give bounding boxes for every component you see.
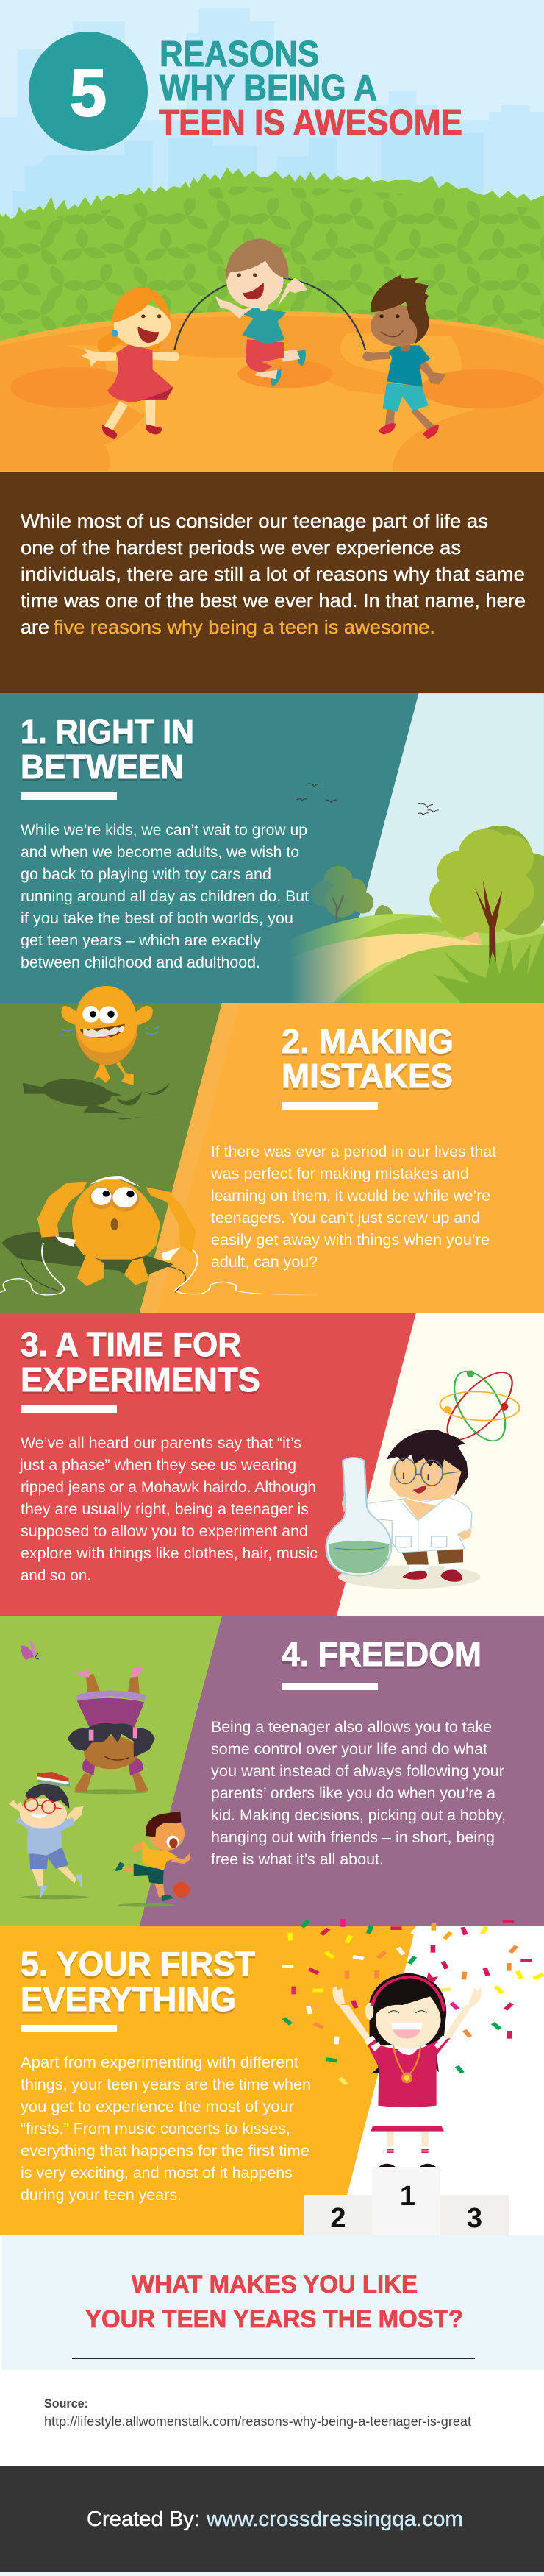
confetti [282,1919,544,2085]
body text: some control over your life and do what [211,1741,487,1758]
logo circle with number 5 [29,32,148,151]
body text: supposed to allow you to experiment and [21,1523,308,1540]
white plug cords [0,1243,64,1295]
created by credit: www.crossdressingqa.com [206,2508,463,2531]
intro panel [0,471,544,693]
body text [21,2054,311,2204]
intro text [21,510,526,638]
heading: MISTAKES [282,1057,453,1095]
intro text: are [21,616,49,638]
big tree [429,826,544,971]
boy jumping in the middle [215,239,307,386]
body text: If there was ever a period in our lives that [211,1143,496,1160]
created by credit [87,2508,463,2531]
body text: is very exciting, and most of it happens [21,2165,293,2182]
body text [19,1435,318,1584]
closing question: WHAT MAKES YOU LIKE [132,2271,418,2299]
butterfly [21,1639,39,1660]
podium [304,2167,509,2235]
source: Source: [44,2396,88,2410]
body text: learning on them, it would be while we’re [211,1188,490,1204]
heading: EVERYTHING [21,1980,236,2018]
handstand girl [68,1667,155,1794]
heading: 5. YOUR FIRST [21,1945,255,1983]
closing question panel [1,2235,544,2370]
logo circle with number 5: 5 [70,57,107,130]
podium: 1 [400,2181,415,2212]
hero panel [0,0,544,472]
title: WHY BEING A [160,68,377,108]
body text: during your teen years. [21,2187,182,2204]
body text: “firsts.” From music concerts to kisses, [21,2121,290,2137]
body text: things, your teen years are the time when [21,2076,311,2093]
kids illustration [9,1639,191,1907]
body text: you get to experience the most of your [21,2098,294,2115]
created by credit: Created By: [87,2508,200,2531]
grass [434,934,544,1003]
body text: go back to playing with toy cars and [21,866,271,883]
intro text: five reasons why being a teen is awesome. [54,616,435,638]
grounded monster shadow [1,1232,173,1279]
body text [21,822,309,971]
intro text: time was one of the best we ever had. In that name, here [21,589,526,611]
section 1: right in between [0,693,544,1003]
winner girl [333,1972,482,2167]
heading: 1. RIGHT IN [21,712,194,751]
footer [0,2466,544,2576]
glasses kid with books [9,1772,89,1899]
body text: While we’re kids, we can’t wait to grow up [21,822,307,839]
heading [21,1945,255,2018]
body text [210,1143,496,1271]
boy on the right with rope [362,275,445,439]
heading: 4. FREEDOM [282,1635,482,1673]
body text: ripped jeans or a Mohawk hairdo. Although [21,1479,316,1496]
intro text: one of the hardest periods we ever experience as [21,536,461,558]
body text: parents’ orders like you do when you’re a [211,1785,495,1802]
small tree [311,866,394,926]
body text: and when we become adults, we wish to [21,844,299,861]
section 4: freedom [0,1616,544,1926]
body text: We’ve all heard our parents say that “it’s [21,1435,301,1452]
body text: explore with things like clothes, hair, music [21,1545,318,1562]
source [44,2396,471,2429]
body text: you want instead of always following your [211,1763,504,1780]
body text: easily get away with things when you’re [211,1232,490,1249]
grounded furry monster [37,1176,196,1286]
body text: just a phase” when they see us wearing [19,1457,296,1474]
podium: 3 [467,2203,482,2234]
body text: adult, can you? [211,1254,318,1271]
birds [296,784,439,815]
body text: hanging out with friends – in short, being [211,1829,495,1846]
atom symbol [435,1366,525,1447]
podium: 2 [330,2203,346,2234]
body text [211,1719,506,1868]
body text: get teen years – which are exactly [21,932,262,949]
intro text: individuals, there are still a lot of reasons why that same [21,563,525,585]
jump rope [174,277,365,350]
closing question [85,2271,463,2333]
body text: teenagers. You can’t just screw up and [211,1210,480,1227]
body text: they are usually right, being a teenager is [21,1501,309,1518]
flying monster [61,986,159,1085]
body text: Being a teenager also allows you to take [211,1719,492,1736]
heading: 2. MAKING [282,1022,454,1060]
heading [21,712,194,786]
running boy with ball [115,1812,191,1907]
body text: and so on. [21,1567,91,1584]
monster illustrations [0,986,323,1295]
hero illustration: city, bush, ground and kids [0,0,544,472]
body text: was perfect for making mistakes and [210,1165,469,1182]
heading: BETWEEN [21,748,184,786]
section 5: your first everything [0,1919,544,2235]
heading [282,1022,454,1095]
source: http://lifestyle.allwomenstalk.com/reasons-why-being-a-teenager-is-great [44,2414,471,2429]
flask with green liquid [326,1458,391,1576]
heading: EXPERIMENTS [21,1360,260,1399]
scientist boy [342,1430,472,1582]
closing question: YOUR TEEN YEARS THE MOST? [85,2305,463,2333]
flying monster shadow [23,1075,170,1120]
landscape illustration [271,693,544,1003]
section 3: a time for experiments [0,1313,544,1616]
body text: Apart from experimenting with different [21,2054,298,2071]
intro text: While most of us consider our teenage part of life as [21,510,488,532]
heading: 3. A TIME FOR [21,1325,241,1363]
body text: free is what it’s all about. [211,1851,384,1868]
girl with red dress [82,288,179,439]
heading [21,1325,260,1399]
body text: kid. Making decisions, picking out a hobby, [211,1807,506,1824]
title: TEEN IS AWESOME [159,103,462,143]
body text: running around all day as children do. But [21,888,309,905]
body text: if you take the best of both worlds, you [21,910,293,927]
scientist illustration [326,1366,525,1589]
body text: between childhood and adulthood. [21,954,260,971]
title [159,35,462,143]
body text: everything that happens for the first time [21,2143,309,2160]
section 2: making mistakes [0,986,544,1313]
title: REASONS [160,35,319,74]
